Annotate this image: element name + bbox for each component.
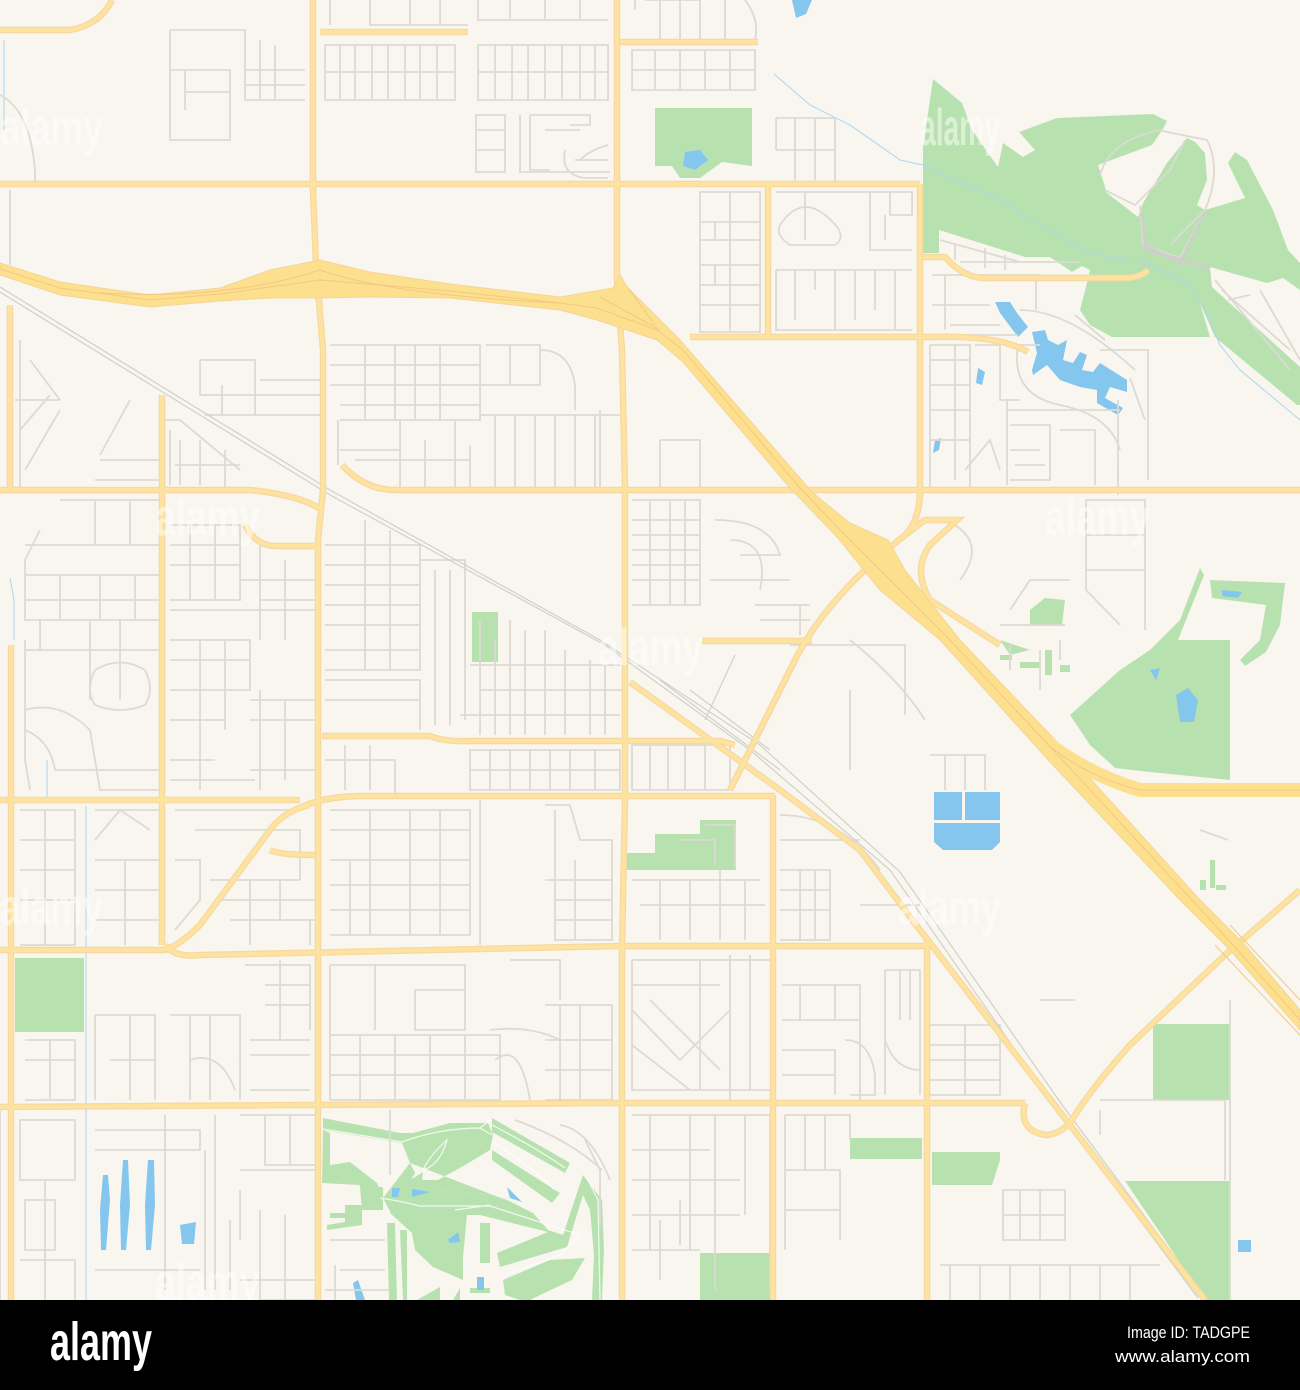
image id: Image ID: TADGPE xyxy=(1127,1323,1250,1342)
alamy logo: alamy xyxy=(50,1312,152,1372)
watermark: alamy xyxy=(898,879,1001,937)
watermark: alamy xyxy=(1045,489,1150,547)
golf course paths xyxy=(323,1120,600,1300)
watermark: alamy xyxy=(0,99,103,157)
bottom credit bar xyxy=(0,1300,1300,1390)
website: www.alamy.com xyxy=(1114,1347,1250,1366)
watermark: alamy xyxy=(155,1254,260,1312)
railway line xyxy=(0,212,1210,1298)
watermark: alamy xyxy=(920,99,1000,157)
watermark: alamy xyxy=(0,879,103,937)
freeway xyxy=(0,260,1300,1035)
watermark: alamy xyxy=(598,619,703,677)
watermark: alamy xyxy=(155,489,260,547)
golf course xyxy=(322,1118,604,1300)
watermark xyxy=(0,99,1150,1312)
